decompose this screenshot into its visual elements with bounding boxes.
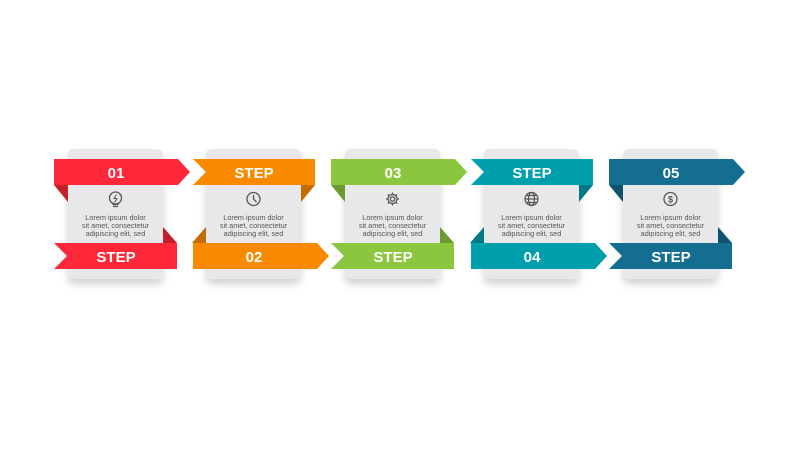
step 2: adipiscing elit, sed [224,229,283,238]
text 3: Lorem ipsum dolor [362,213,423,222]
step 2: 02 [246,249,262,266]
ribbon 1 top [54,159,190,185]
step 4: 04 [524,249,541,266]
step 3: 03 [385,165,401,182]
step 5: adipiscing elit, sed [641,229,700,238]
card 2 [206,149,301,279]
fold 5 bottom [718,227,732,243]
step 2: STEP [234,165,274,182]
step 3: sit amet, consectetur [359,221,427,230]
step 1 [54,149,190,279]
ribbon 4 top [471,159,593,185]
text 1: Lorem ipsum dolor [85,213,146,222]
icon: dollar: $ [668,194,673,204]
icon: gear [386,192,399,206]
step 3: STEP [373,249,413,266]
step 4: STEP [512,165,552,182]
fold 4 top [579,185,593,202]
step 4: adipiscing elit, sed [502,229,561,238]
ribbon 5 bottom [609,243,732,269]
fold 1 bottom [163,227,177,243]
ribbon 3 top [331,159,467,185]
step 1: 01 [108,165,124,182]
step 5: sit amet, consectetur [637,221,705,230]
ribbon 2 bottom [193,243,329,269]
step 2: sit amet, consectetur [220,221,288,230]
fold 5 top [609,185,623,202]
step 1: STEP [96,249,136,266]
card 1 [68,149,163,279]
icon: lightbulb [110,192,122,206]
step 5 [609,149,745,279]
text 4: Lorem ipsum dolor [501,213,562,222]
fold 2 top [301,185,315,202]
step 3: adipiscing elit, sed [363,229,422,238]
step 4 [470,149,607,279]
icon: clock [247,192,260,206]
fold 1 top [54,185,68,202]
step 3 [331,149,467,279]
text 5: Lorem ipsum dolor [640,213,701,222]
ribbon 5 top [609,159,745,185]
step 5: STEP [651,249,691,266]
step 1: adipiscing elit, sed [86,229,145,238]
ribbon 1 bottom [54,243,177,269]
text 2: Lorem ipsum dolor [223,213,284,222]
step 5: 05 [663,165,679,182]
icon: globe [525,192,538,206]
card 5 [623,149,718,279]
fold 3 top [331,185,345,202]
fold 3 bottom [440,227,454,243]
step 4: sit amet, consectetur [498,221,566,230]
step 1: sit amet, consectetur [82,221,150,230]
ribbon 4 bottom [471,243,607,269]
card 3 [345,149,440,279]
fold 4 bottom [470,227,484,243]
ribbon 2 top [193,159,315,185]
fold 2 bottom [192,227,206,243]
ribbon 3 bottom [331,243,454,269]
card 4 [484,149,579,279]
step 2 [192,149,329,279]
